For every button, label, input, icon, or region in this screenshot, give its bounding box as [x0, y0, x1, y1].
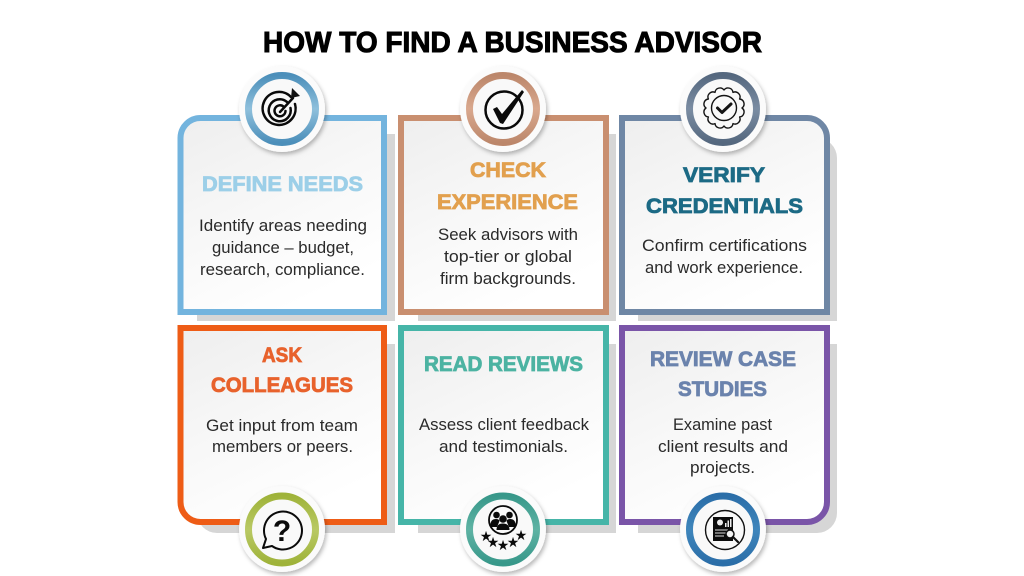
text: ask colleagues description — [206, 417, 358, 456]
heading: review case studies: STUDIES — [678, 378, 767, 401]
text: define needs description: guidance – budget, — [212, 239, 354, 257]
heading: verify credentials: VERIFY — [683, 164, 765, 187]
panel: verify credentials — [622, 66, 837, 321]
text: verify credentials description — [642, 237, 807, 277]
heading: check experience: EXPERIENCE — [437, 191, 578, 214]
icon: people with star rating: ★ — [480, 529, 492, 545]
title: HOW TO FIND A BUSINESS ADVISOR — [263, 27, 762, 59]
heading: ask colleagues: ASK — [262, 344, 302, 367]
text: review case studies description: client results and — [658, 438, 788, 456]
icon: check mark — [460, 66, 546, 152]
text: read reviews description: and testimonials. — [439, 438, 568, 456]
text: review case studies description: Examine past — [673, 416, 772, 434]
icon: question speech bubble — [239, 486, 325, 572]
text: check experience description: firm backgrounds. — [440, 270, 576, 288]
heading: review case studies: REVIEW CASE — [650, 348, 796, 371]
icon: target with arrow — [239, 66, 325, 152]
text: ask colleagues description: Get input from team — [206, 417, 358, 435]
icon: people with star rating: ★ — [497, 538, 509, 554]
icon: people with star rating: ★ — [515, 528, 527, 544]
text: review case studies description — [658, 416, 788, 477]
text: define needs description: research, compliance. — [200, 261, 365, 279]
icon: question speech bubble: ? — [273, 515, 291, 548]
panel: check experience — [401, 66, 616, 321]
panel: read reviews — [401, 328, 616, 572]
text: read reviews description — [419, 416, 590, 456]
heading: define needs: DEFINE NEEDS — [202, 173, 363, 196]
heading: check experience — [437, 159, 578, 214]
icon: report with magnifier — [680, 486, 766, 572]
heading: review case studies — [650, 348, 796, 401]
text: verify credentials description: and work experience. — [645, 259, 803, 277]
text: check experience description: top-tier or global — [444, 248, 572, 266]
heading: check experience: CHECK — [470, 159, 546, 182]
text: define needs description — [199, 217, 367, 279]
icon: people with star rating: ★ — [507, 535, 519, 551]
heading: ask colleagues — [211, 344, 353, 397]
heading: ask colleagues: COLLEAGUES — [211, 374, 353, 397]
text: verify credentials description: Confirm certifications — [642, 237, 807, 255]
text: check experience description — [438, 226, 578, 288]
panel: review case studies — [622, 328, 837, 572]
text: read reviews description: Assess client feedback — [419, 416, 590, 434]
heading: verify credentials: CREDENTIALS — [646, 195, 803, 218]
icon: people with star rating: ★ — [487, 535, 499, 551]
text: define needs description: Identify areas needing — [199, 217, 367, 235]
heading: verify credentials — [646, 164, 803, 218]
icon: certified badge — [680, 66, 766, 152]
text: review case studies description: projects. — [690, 459, 755, 477]
heading: read reviews: READ REVIEWS — [424, 353, 583, 376]
panel: ask colleagues — [180, 328, 395, 572]
icon: people with star rating — [460, 486, 546, 572]
text: check experience description: Seek advisors with — [438, 226, 578, 244]
text: ask colleagues description: members or peers. — [212, 438, 353, 456]
panel: define needs — [180, 66, 395, 321]
